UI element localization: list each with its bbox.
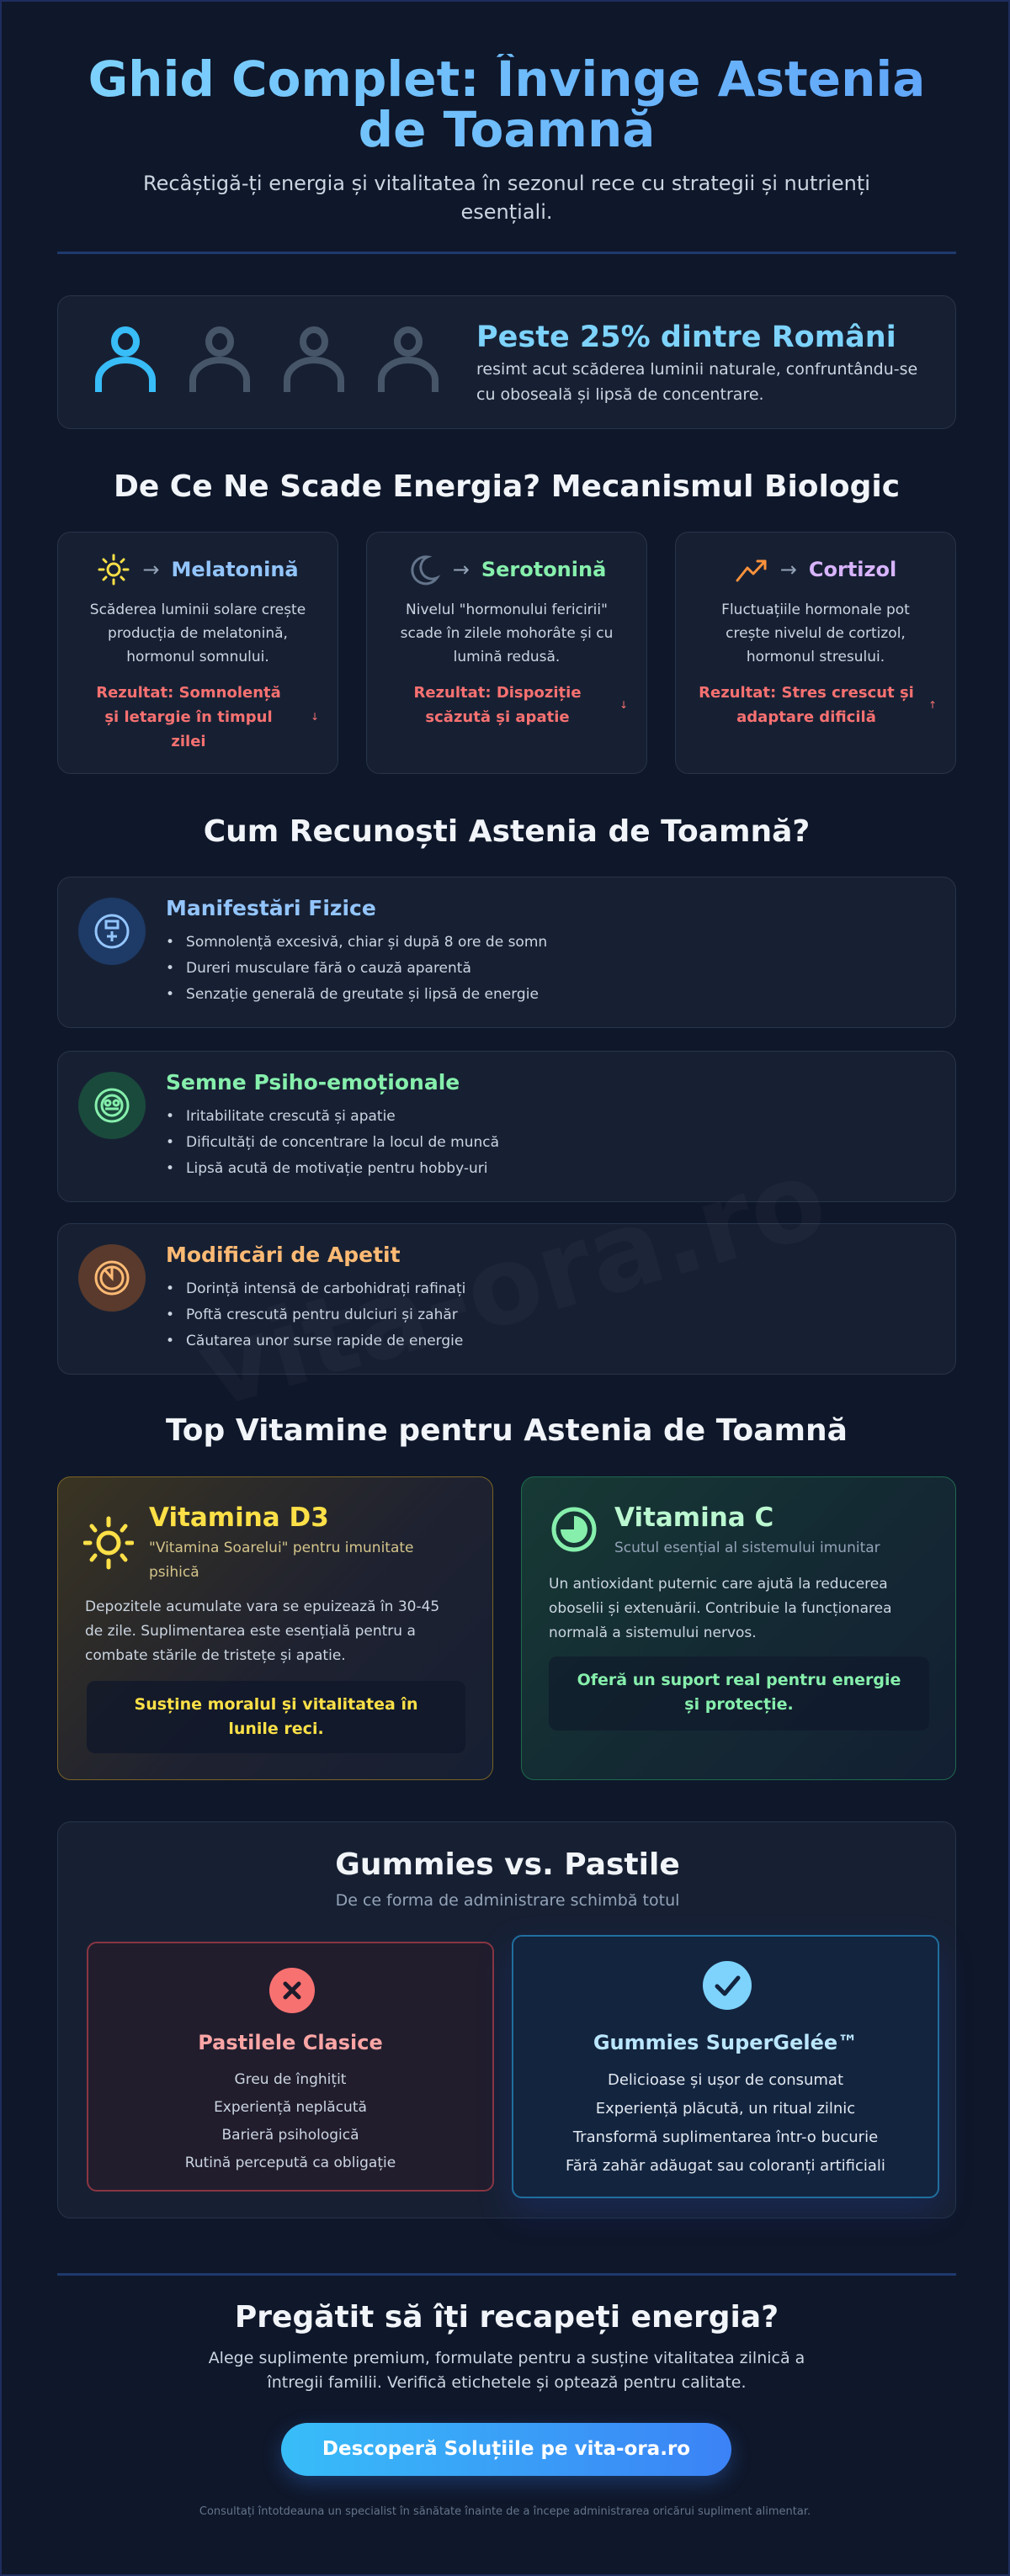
panel: fizice: Somnolență excesivă, chiar și după 8 ore de somn [186,934,547,951]
panel: serotonina [366,532,647,774]
panel: vitamina C: Vitamina C [614,1503,773,1533]
disclaimer: Consultați întotdeauna un specialist în sănătate înainte de a începe administrarea oricărui supliment alimentar. [199,2505,811,2518]
icon: vitamin C [552,1508,596,1551]
heading: mecanism: De Ce Ne Scade Energia? Mecanismul Biologic [114,469,900,504]
card: pastile [87,1942,494,2192]
panel: apetit: Poftă crescută pentru dulciuri și zahăr [186,1307,458,1323]
icon: fourth person [378,326,439,392]
title: Ghid Complet: Învinge Astenia de Toamnă [88,50,925,158]
icon: fizice [78,898,146,965]
panel: apetit [57,1223,956,1375]
CTA button [281,2423,731,2476]
heading: CTA: Pregătit să îți recapeți energia? [235,2300,779,2335]
header cortizol [736,558,896,582]
card: pastile: Rutină percepută ca obligație [185,2155,396,2171]
header serotonina: Serotonină [481,558,606,581]
header cortizol: Cortizol [809,558,896,581]
callout C: Oferă un suport real pentru energie și protecție. [577,1671,901,1714]
panel: psiho: Semne Psiho-emoționale [166,1070,460,1095]
panel: vitamina D3 [57,1476,493,1780]
panel: vitamina D3: Vitamina D3 [149,1503,329,1533]
panel: psiho: Iritabilitate crescută și apatie [186,1108,396,1125]
panel: melatonina [57,532,338,774]
panel: statistic [57,295,956,429]
panel: cortizol [675,532,956,774]
card: gummies: Experiență plăcută, un ritual zilnic [596,2100,855,2118]
panel: gummies vs pastile: Gummies vs. Pastile [335,1847,680,1882]
panel: fizice [57,877,956,1028]
header serotonina: → [453,558,470,581]
subtitle: Recâștigă-ți energia și vitalitatea în sezonul rece cu strategii și nutrienți esențiali. [143,172,870,224]
panel: gummies vs pastile [57,1821,956,2218]
panel: psiho [57,1051,956,1202]
card: pastile: Barieră psihologică [221,2127,359,2144]
result cortizol: Rezultat: Stres crescut și adaptare dificilă [699,684,914,726]
callout C [549,1656,929,1731]
icon: check [703,1961,752,2010]
header cortizol: → [780,558,797,581]
card: gummies: Transformă suplimentarea într-o bucurie [573,2128,878,2146]
card: pastile: Greu de înghițit [235,2071,346,2088]
CTA text: Alege suplimente premium, formulate pentru a susține vitalitatea zilnică a întregii familii. Verifică etichetele și optează pentru calitate. [209,2349,805,2392]
header melatonina: Melatonină [171,558,299,581]
panel: fizice: Manifestări Fizice [166,896,376,920]
panel: serotonina: Nivelul "hormonului fericirii" scade în zilele mohorâte și cu lumină redusă. [401,602,613,665]
icon: x [269,1968,315,2013]
result serotonina: Rezultat: Dispoziție scăzută și apatie [413,684,582,726]
callout D3: Susține moralul și vitalitatea în lunile reci. [135,1695,417,1738]
heading: vitamine: Top Vitamine pentru Astenia de Toamnă [166,1413,848,1448]
card: gummies: Fără zahăr adăugat sau coloranți artificiali [566,2157,885,2175]
CTA button: Descoperă Soluțiile pe vita-ora.ro [322,2438,690,2460]
card: gummies: Gummies SuperGelée™ [593,2031,858,2054]
panel: vitamina D3: Depozitele acumulate vara se epuizează în 30-45 de zile. Suplimentarea este esențială pentru a combate stările de tristețe și apatie. [85,1598,439,1664]
header serotonina [411,555,606,586]
panel: psiho: Dificultăți de concentrare la locul de muncă [186,1134,499,1151]
header melatonina: → [142,558,159,581]
panel: fizice: Dureri musculare fără o cauză aparentă [186,960,471,977]
panel: melatonina: ↓ [311,711,319,723]
panel: apetit: Modificări de Apetit [166,1243,401,1267]
panel: apetit: Căutarea unor surse rapide de energie [186,1333,463,1349]
panel: cortizol: Fluctuațiile hormonale pot crește nivelul de cortizol, hormonul stresului. [721,602,910,665]
panel: apetit: Dorință intensă de carbohidrați rafinați [186,1280,465,1297]
panel: vitamina C [521,1476,956,1780]
card: gummies: Delicioase și ușor de consumat [608,2071,843,2089]
panel: vitamina C: Un antioxidant puternic care ajută la reducerea oboselii și extenuării. Contribuie la funcționarea normală a sistemului nervos. [549,1576,892,1641]
panel: gummies vs pastile: De ce forma de administrare schimbă totul [336,1891,679,1910]
stat heading: Peste 25% dintre Români [476,321,896,354]
icon: psiho [78,1072,146,1139]
card: pastile: Pastilele Clasice [198,2031,383,2054]
watermark: vita-ora.ro [186,1135,839,1434]
panel: cortizol: ↑ [928,699,937,711]
panel: fizice: Senzație generală de greutate și lipsă de energie [186,986,539,1003]
panel: melatonina: Scăderea luminii solare crește producția de melatonină, hormonul somnului. [90,602,306,665]
heading: simptome: Cum Recunoști Astenia de Toamnă? [204,814,810,849]
panel: psiho: Lipsă acută de motivație pentru hobby-uri [186,1160,487,1177]
callout D3 [87,1681,465,1753]
stat text: resimt acut scăderea luminii naturale, confruntându-se cu oboseală și lipsă de concentrare. [476,360,917,404]
icon: sun [83,1516,134,1570]
icon: people [95,326,344,392]
card: pastile: Experiență neplăcută [214,2099,367,2116]
card: gummies [512,1935,939,2198]
panel: vitamina C: Scutul esențial al sistemului imunitar [614,1540,880,1556]
panel: serotonina: ↓ [619,699,628,711]
header melatonina [98,554,299,586]
panel: vitamina D3: "Vitamina Soarelui" pentru imunitate psihică [149,1540,414,1581]
result melatonina: Rezultat: Somnolență și letargie în timpul zilei [96,684,281,750]
icon: apetit [78,1244,146,1312]
